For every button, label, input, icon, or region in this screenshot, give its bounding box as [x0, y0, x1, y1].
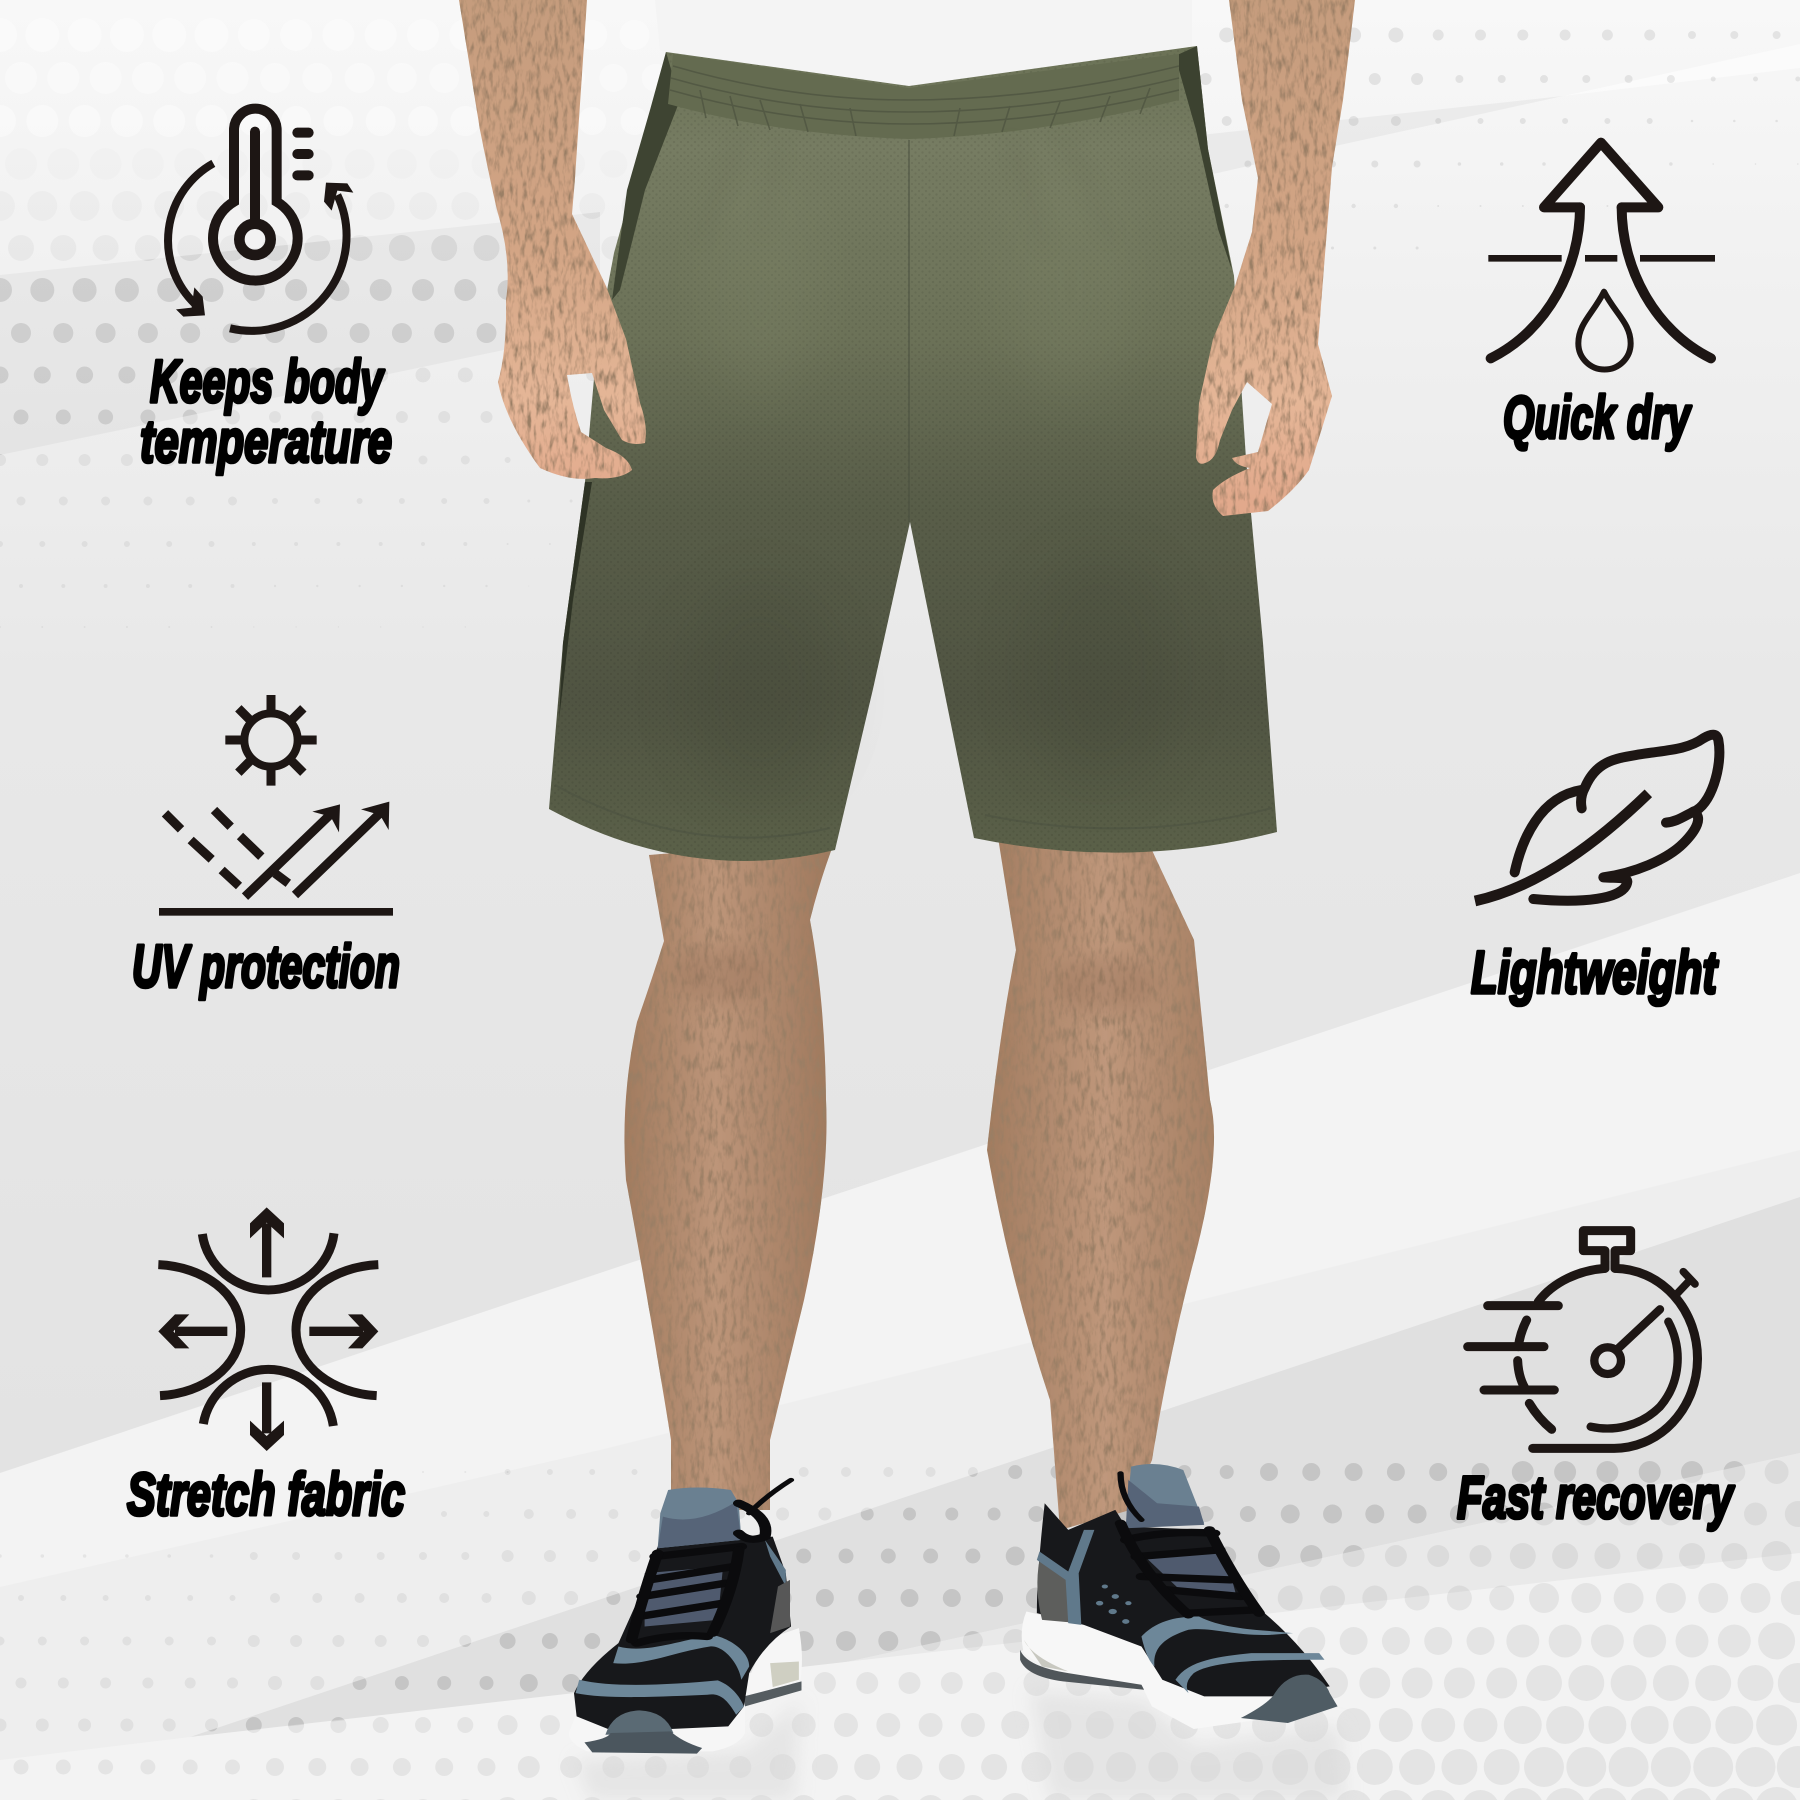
side panels	[612, 52, 680, 300]
label: UV protection: UV protection	[132, 933, 400, 1000]
label: keeps body temperature	[140, 348, 392, 475]
icon: sun and reflected rays	[159, 695, 393, 916]
floor reflections	[575, 1690, 1345, 1800]
icon: four-way stretch arrows	[158, 1207, 378, 1451]
feature: UV protection	[132, 695, 400, 1000]
label: lightweight: Lightweight	[1471, 939, 1719, 1006]
icon: moisture rising arrow	[1488, 143, 1715, 369]
model figure	[459, 0, 1355, 1530]
right leg	[987, 825, 1214, 1530]
icon: stopwatch with speed lines	[1468, 1231, 1698, 1448]
label: keeps body temperature: Keeps body	[150, 348, 385, 415]
feature: stretch fabric	[127, 1207, 405, 1528]
feature: keeps body temperature	[140, 109, 392, 475]
left leg	[624, 840, 835, 1510]
right arm and hand	[1196, 0, 1355, 516]
label: quick dry: Quick dry	[1503, 384, 1692, 451]
feature: quick dry	[1488, 143, 1715, 451]
left shoe	[569, 1480, 802, 1754]
label: keeps body temperature: temperature	[140, 408, 392, 475]
feature: lightweight	[1471, 735, 1719, 1006]
right shoe	[1020, 1464, 1338, 1729]
white shirt	[655, 0, 1192, 88]
label: stretch fabric: Stretch fabric	[127, 1461, 405, 1528]
shorts	[549, 46, 1277, 861]
feature: fast recovery	[1457, 1231, 1735, 1531]
icon: feather	[1475, 735, 1719, 901]
left arm and hand	[459, 0, 646, 479]
waistband	[668, 54, 1179, 139]
icon: thermometer with cycle arrows	[168, 109, 353, 331]
knee shading	[675, 947, 1155, 1013]
folds and seams	[555, 140, 1272, 838]
